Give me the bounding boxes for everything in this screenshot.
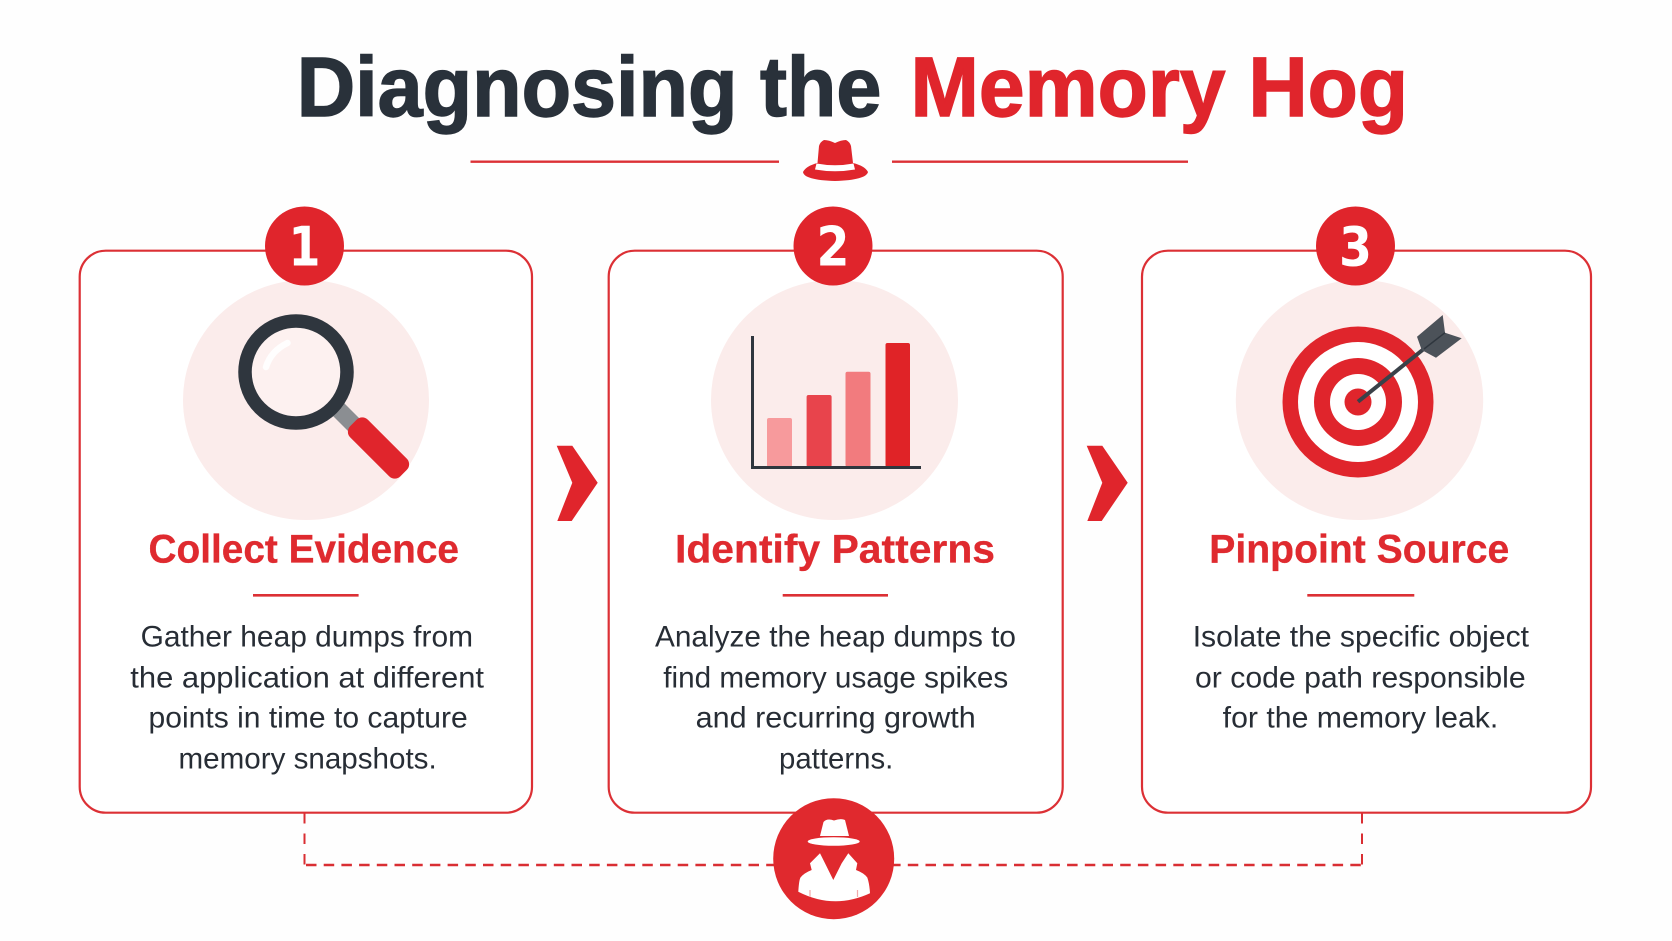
number badge 2: 2 [816,216,850,278]
icon: target with arrow [1282,315,1462,478]
icon: magnifying glass [245,321,412,482]
description text 1 [130,621,485,775]
title: Diagnosing the [297,40,881,134]
description text 1: the application at different [130,661,485,694]
panel: collect evidence [80,206,532,813]
card outline 1 [80,251,532,813]
description text 1: memory snapshots. [178,742,437,775]
number badge 3: 3 [1339,216,1372,278]
number badge 1 [265,206,344,286]
title: Memory Hog [910,40,1408,134]
description text 1: Gather heap dumps from [141,621,473,654]
description text 2: find memory usage spikes [663,661,1008,694]
card outline 3 [1142,251,1591,813]
heading: identify patterns: Identify Patterns [675,528,995,572]
icon: detective badge [773,798,894,919]
panel: identify patterns [609,206,1063,813]
card outline 2 [609,251,1063,813]
arrow: step 1 to 2 [557,446,598,521]
description text 2 [655,621,1016,775]
description text 1: points in time to capture [148,701,468,734]
heading: collect evidence: Collect Evidence [148,528,459,572]
description text 3 [1193,621,1530,734]
icon circle background 3 [1236,280,1483,520]
description text 3: or code path responsible [1195,661,1526,694]
description text 3: for the memory leak. [1223,701,1498,734]
number badge 2 [794,206,872,286]
title [297,40,1408,134]
icon circle background 1 [183,280,429,520]
icon circle background 2 [711,280,958,520]
bar chart icon [752,336,921,468]
description text 3: Isolate the specific object [1193,621,1530,654]
description text 2: Analyze the heap dumps to [655,621,1016,654]
panel: pinpoint source [1142,206,1591,813]
title divider with hat icon [470,140,1188,181]
description text 2: and recurring growth [696,701,976,734]
number badge 3 [1316,206,1395,286]
connector: dashed line linking cards to detective [304,813,1362,865]
arrow: step 2 to 3 [1087,446,1128,521]
description text 2: patterns. [779,742,893,775]
heading: pinpoint source: Pinpoint Source [1209,528,1509,572]
number badge 1: 1 [288,216,320,278]
